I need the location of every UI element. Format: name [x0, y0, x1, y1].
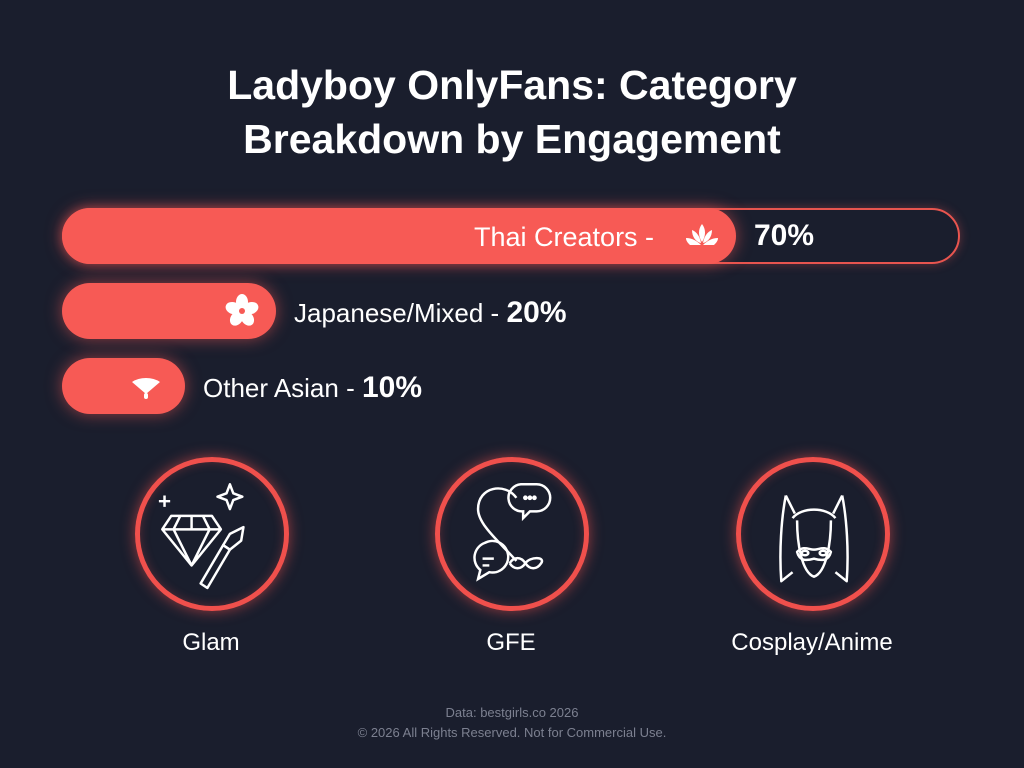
icon: cat-eared masked girl	[779, 495, 849, 582]
footer	[358, 705, 666, 740]
category: GFE: GFE	[486, 629, 536, 656]
category: Cosplay/Anime	[726, 448, 900, 656]
footer: © 2026 All Rights Reserved. Not for Commercial Use.	[358, 725, 666, 740]
icon: lotus	[686, 224, 718, 245]
bar: Japanese/Mixed	[52, 272, 566, 350]
icon: diamond and brush	[158, 483, 245, 590]
footer: Data: bestgirls.co 2026	[446, 705, 578, 720]
category: Cosplay/Anime: Cosplay/Anime	[731, 629, 893, 656]
title: Ladyboy OnlyFans: Category	[227, 62, 797, 108]
title: Breakdown by Engagement	[243, 116, 781, 162]
title	[227, 62, 797, 162]
icon: sakura	[226, 294, 258, 326]
category: Glam	[126, 448, 298, 656]
icon: fan	[132, 378, 160, 399]
category: GFE	[426, 448, 598, 656]
icon: heart chat infinity	[473, 483, 552, 582]
bar: Other Asian	[52, 347, 422, 425]
bar: Thai Creators	[52, 197, 965, 275]
bar: Japanese/Mixed: Japanese/Mixed - 20%	[294, 296, 566, 329]
category: Glam: Glam	[182, 629, 240, 656]
bar: Thai Creators: 70%	[754, 219, 814, 252]
bar: Other Asian: Other Asian - 10%	[203, 371, 422, 404]
bar: Thai Creators: Thai Creators -	[474, 222, 654, 252]
